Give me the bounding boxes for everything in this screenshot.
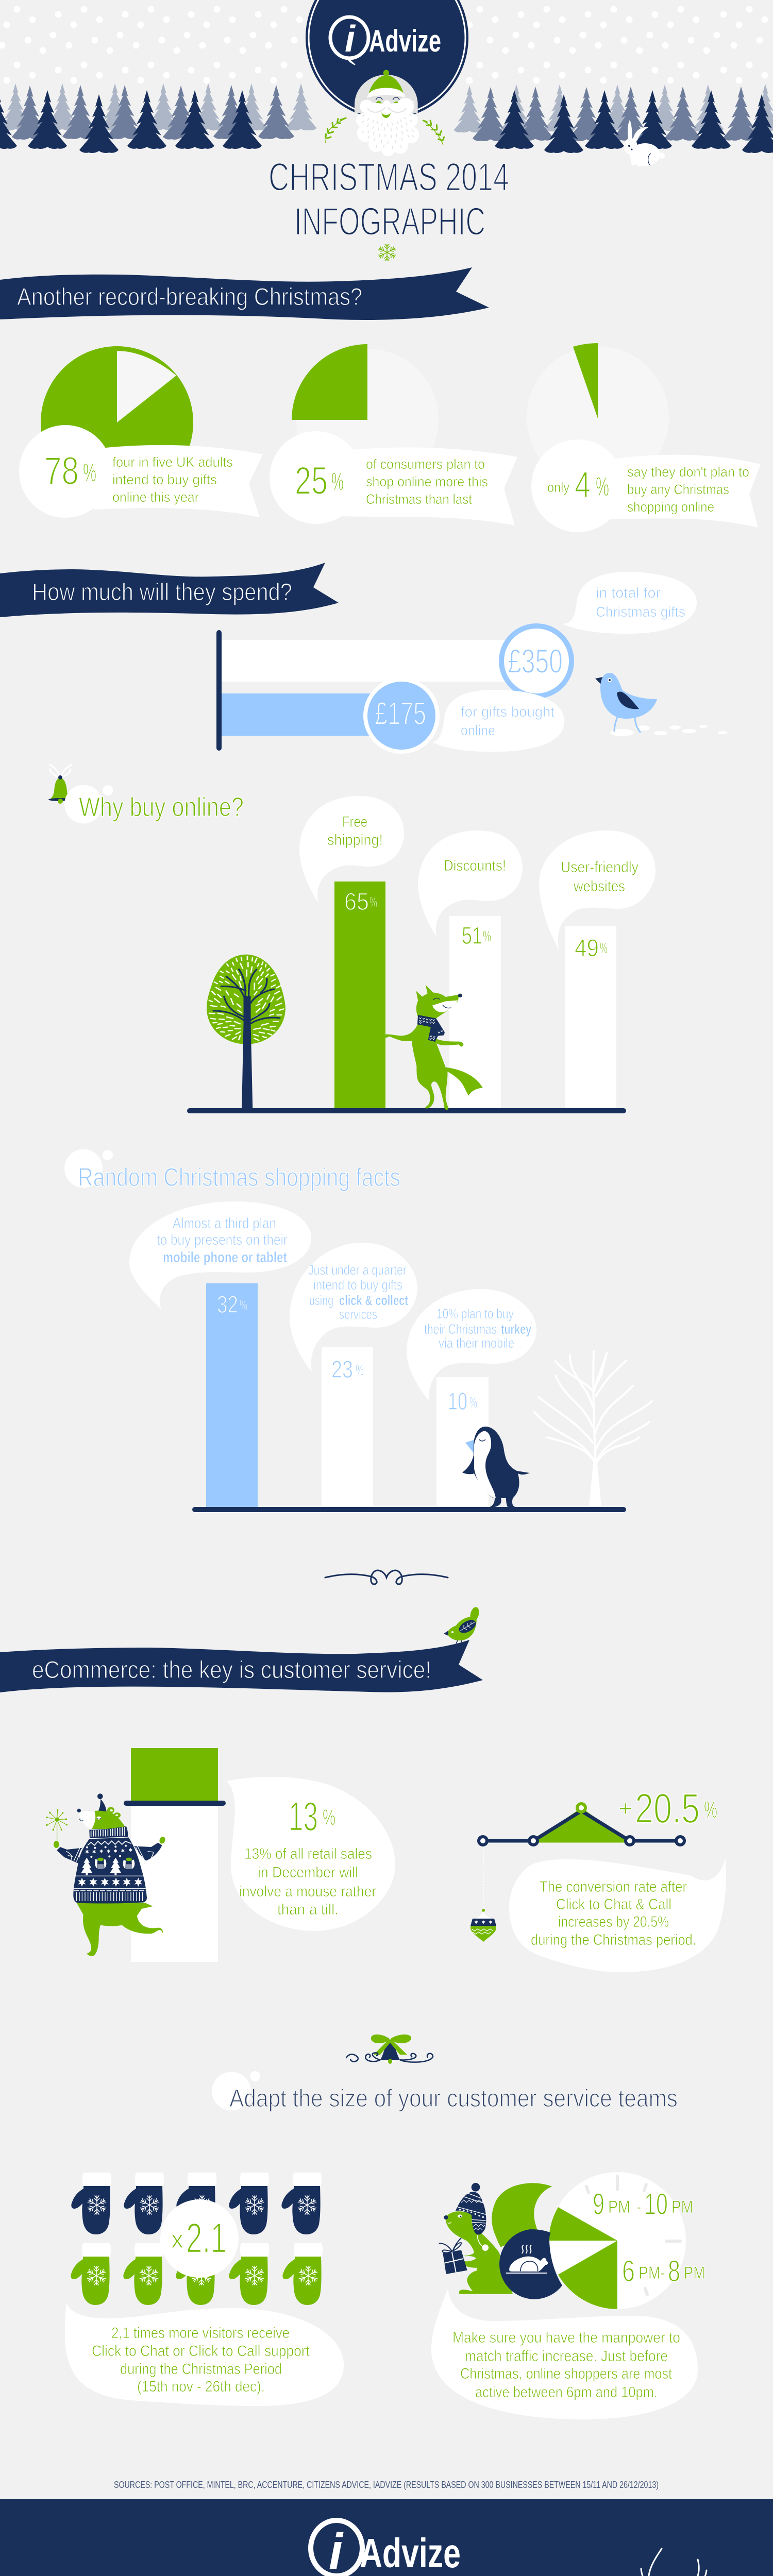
panel: 78 percent (19, 346, 263, 518)
bubble: user-friendly: websites (573, 878, 625, 895)
stat: 6pm to 8pm: 8 (668, 2255, 680, 2288)
callout (531, 439, 761, 532)
heading: random shopping facts: Random Christmas shopping facts (78, 1163, 400, 1192)
bar: 49%: 49 (575, 934, 599, 961)
bar: 51% (449, 916, 501, 1108)
logo: iAdvize: Advize (360, 2530, 461, 2576)
speech bubble: conversion rate: The conversion rate after (540, 1878, 687, 1895)
callout (19, 425, 263, 518)
icon: bell with bow (346, 2035, 433, 2064)
logo badge: i (345, 19, 356, 60)
bar: 65%: 65 (344, 888, 369, 915)
bar: 23% (322, 1347, 373, 1507)
stat: 6pm to 8pm: 6 (622, 2255, 635, 2288)
stat: 6pm to 8pm: PM (684, 2263, 705, 2283)
decorative flourish (325, 1570, 448, 1584)
bubble: turkey: 10% plan to buy (436, 1306, 514, 1321)
bubble: turkey: turkey (501, 1321, 531, 1337)
stat: 6pm to 8pm: PM- (638, 2263, 665, 2283)
speech bubble: online: for gifts bought (461, 704, 554, 720)
bar: 51%: 51 (462, 922, 482, 949)
speech bubble: total: in total for (596, 585, 661, 601)
callout: four in five UK adults (112, 454, 233, 470)
speech bubble: conversion rate: increases by 20,5% (558, 1913, 669, 1930)
pie chart 78% (41, 346, 193, 499)
speech bubble: 13 percent: in December will (258, 1864, 358, 1881)
bubble: user-friendly (539, 831, 656, 950)
callout: of consumers plan to (366, 456, 485, 472)
stat: 6pm to 8pm (622, 2255, 705, 2288)
heading: why buy online: Why buy online? (79, 792, 244, 822)
pie chart 25% (292, 344, 439, 491)
speech bubble: 13 percent: than a till. (277, 1901, 339, 1918)
icon: green mittens (71, 2243, 323, 2305)
callout: shopping online (627, 499, 714, 515)
panel: 25 percent (270, 344, 517, 526)
callout (270, 431, 517, 526)
banner: how much will they spend: How much will they spend? (32, 578, 292, 605)
speech bubble: 13 percent (227, 1777, 395, 1931)
footer panel (0, 2499, 773, 2576)
stat: 9pm to 10pm: 10 (644, 2188, 668, 2221)
bubble: mobile or tablet: mobile phone or tablet (163, 1249, 287, 1266)
line chart (479, 1804, 684, 1845)
icon: hanging bauble (470, 1847, 496, 1942)
speech bubble: manpower: Make sure you have the manpower to (452, 2329, 680, 2346)
callout: intend to buy gifts (112, 472, 217, 487)
speech bubble: online: online (461, 722, 495, 738)
bubble: discounts: Discounts! (444, 857, 506, 874)
bubble: free shipping: Free (342, 814, 367, 831)
callout: only (547, 480, 569, 495)
stat: +20.5%: 20.5 (635, 1785, 700, 1832)
icon: bear in Christmas jumper (46, 1793, 166, 1956)
bubble: turkey: via their mobile (439, 1335, 514, 1351)
banner: ecommerce customer service (0, 1640, 483, 1692)
icon: reindeer (641, 2549, 722, 2576)
bubble: click and collect (290, 1243, 417, 1372)
banner: another record-breaking Christmas (0, 267, 489, 320)
title: INFOGRAPHIC (294, 200, 485, 244)
icon: squirrel (439, 2183, 552, 2294)
bubble: click and collect: intend to buy gifts (313, 1277, 402, 1293)
callout: 25 (295, 459, 328, 503)
header scene (0, 0, 773, 167)
ground line (192, 1507, 626, 1512)
icon: santa (326, 70, 444, 156)
speech bubble: manpower: active between 6pm and 10pm. (475, 2384, 658, 2401)
bar: 13 percent (124, 1748, 226, 1962)
speech bubble: 13 percent: 13 (289, 1793, 318, 1839)
bar: 65% (334, 882, 385, 1108)
icon: blue bird (595, 673, 727, 736)
bar: 10% (436, 1377, 489, 1507)
callout: Christmas than last (366, 492, 472, 507)
bar: 23%: 23 (331, 1355, 353, 1383)
callout: % (596, 472, 609, 502)
speech bubble: visitors: 2,1 times more visitors receive (111, 2325, 290, 2342)
speech bubble: online (431, 690, 564, 752)
pine forest (0, 83, 773, 153)
bar: 49% (565, 926, 616, 1108)
bar: 32%: 32 (217, 1291, 238, 1318)
panel: mittens x2.1 (65, 2173, 344, 2406)
banner: ecommerce customer service: eCommerce: the key is customer service! (32, 1656, 431, 1683)
icon: bell (48, 765, 72, 804)
bubble: user-friendly: User-friendly (561, 859, 638, 876)
stat: 9pm to 10pm: PM (608, 2197, 630, 2217)
chart: why buy online (187, 796, 656, 1113)
icon: snowflake (378, 244, 396, 261)
icon: turkey circle (499, 2229, 562, 2299)
callout: x2.1 (160, 2199, 239, 2278)
speech bubble: total (563, 572, 697, 634)
speech bubble: 13 percent: 13% of all retail sales (244, 1845, 372, 1862)
panel: 4 percent (527, 343, 761, 532)
bar: 32%: % (240, 1297, 247, 1314)
icon: rabbit (624, 120, 665, 167)
callout: buy any Christmas (627, 482, 729, 497)
bubble: free shipping: shipping! (327, 832, 383, 849)
bubble: free shipping (299, 796, 404, 902)
chart: shopping facts (129, 1201, 652, 1512)
speech bubble: visitors: (15th nov - 26th dec). (137, 2378, 265, 2395)
callout: 175: £175 (375, 696, 426, 732)
banner: another record-breaking Christmas: Another record-breaking Christmas? (17, 283, 362, 310)
bubble: mobile or tablet (129, 1201, 311, 1309)
speech bubble: 13 percent: involve a mouse rather (239, 1883, 376, 1900)
heading: adapt customer service teams: Adapt the size of your customer service teams (229, 2085, 678, 2112)
callout: % (331, 468, 344, 496)
clock chart (549, 2172, 686, 2309)
callout: 78 (44, 449, 79, 493)
falling snow (0, 6, 768, 83)
stat: 9pm to 10pm (593, 2188, 693, 2221)
bubble: click and collect: click & collect (339, 1293, 408, 1308)
bubble: click and collect: services (339, 1307, 377, 1322)
stat: 9pm to 10pm: PM (671, 2197, 693, 2217)
icon: penguin (462, 1427, 530, 1507)
ground line (187, 1108, 626, 1113)
logo badge: Advize (369, 24, 441, 58)
stat: +20.5%: + (618, 1796, 632, 1821)
bubble: discounts (418, 831, 523, 937)
pie chart 4% (527, 343, 669, 488)
bubble: click and collect: using (309, 1293, 333, 1308)
speech bubble: conversion rate: Click to Chat & Call (556, 1896, 671, 1913)
bubble: mobile or tablet: Almost a third plan (173, 1215, 276, 1232)
bar: 51%: % (483, 928, 491, 945)
icon: green tree (207, 955, 285, 1108)
callout: x2.1: 2.1 (186, 2215, 227, 2262)
bar: 10%: % (469, 1394, 477, 1411)
speech bubble: conversion rate: during the Christmas period. (531, 1931, 696, 1948)
callout: % (83, 458, 96, 487)
heading: random shopping facts (64, 1149, 400, 1192)
heading: adapt customer service teams (212, 2071, 678, 2112)
bubble: mobile or tablet: to buy presents on their (157, 1232, 288, 1248)
callout: 4 (575, 465, 591, 506)
icon: fox (385, 985, 485, 1110)
bubble: click and collect: Just under a quarter (308, 1262, 407, 1278)
speech bubble: 13 percent: % (323, 1805, 335, 1830)
speech bubble: manpower (431, 2289, 698, 2419)
speech bubble: manpower: match traffic increase. Just before (465, 2348, 668, 2365)
chart: spend bars (216, 572, 697, 752)
bar: 65%: % (369, 894, 377, 911)
speech bubble: total: Christmas gifts (596, 604, 685, 620)
bar: 23%: % (356, 1362, 364, 1379)
callout: 350: £350 (508, 642, 563, 680)
bubble: turkey: their Christmas (424, 1321, 497, 1337)
callout: say they don't plan to (627, 464, 749, 480)
callout: 175 (365, 680, 438, 752)
stat: 9pm to 10pm: 9 (593, 2188, 604, 2221)
callout: x2.1: x (171, 2226, 183, 2253)
speech bubble: visitors: Click to Chat or Click to Call support (92, 2343, 310, 2360)
speech bubble: visitors: during the Christmas Period (120, 2361, 282, 2378)
logo: iAdvize (311, 2520, 461, 2576)
callout: shop online more this (366, 474, 488, 489)
title: CHRISTMAS 2014 (268, 155, 509, 199)
logo badge (306, 0, 468, 119)
icon: green bird (444, 1606, 480, 1643)
icon: white bare tree (534, 1351, 652, 1507)
speech bubble: conversion rate (509, 1858, 726, 1972)
icon: navy mittens (71, 2173, 322, 2234)
title (268, 155, 509, 244)
bar: 49%: % (600, 940, 608, 957)
speech bubble: visitors (65, 2302, 344, 2406)
speech bubble: manpower: Christmas, online shoppers are most (460, 2365, 673, 2382)
callout: 350 (501, 626, 572, 696)
stat: +20.5%: % (704, 1796, 717, 1823)
banner: how much will they spend (0, 563, 339, 617)
bubble: turkey (407, 1289, 536, 1401)
callout: online this year (112, 489, 199, 505)
bar: 32% (206, 1283, 258, 1507)
panel: 13 percent (46, 1748, 395, 1962)
heading: why buy online (64, 785, 244, 823)
stat: 9pm to 10pm: - (637, 2197, 641, 2217)
panel: peak hours (431, 2172, 705, 2419)
bar: 10%: 10 (448, 1387, 467, 1415)
panel: conversion rate (470, 1785, 726, 1972)
